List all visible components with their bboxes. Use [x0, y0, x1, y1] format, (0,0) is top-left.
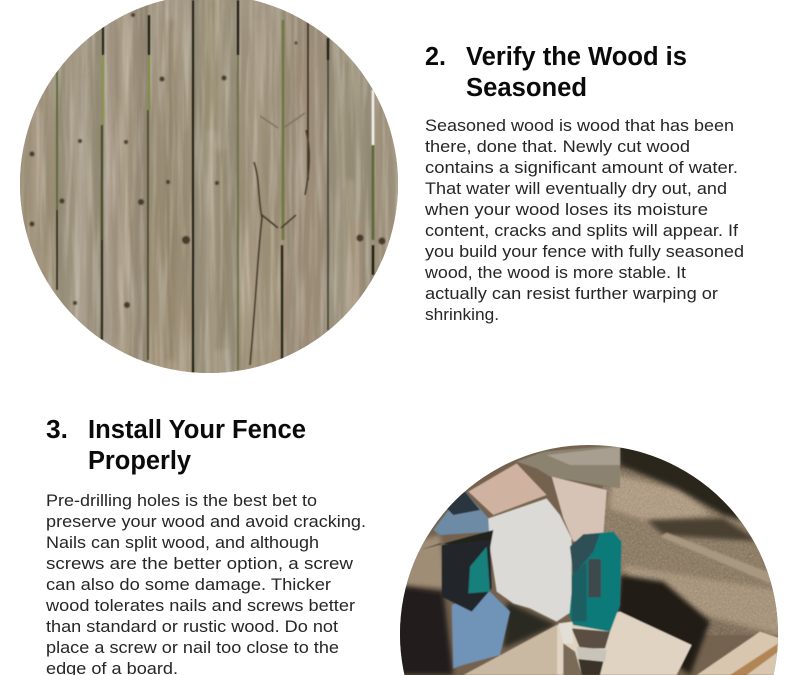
- photo: weathered wooden fence in a circle: [15, 0, 405, 380]
- heading: 3. Install Your Fence Properly: 3.: [46, 416, 68, 444]
- text block: install properly: place a screw or nail too close to the: [46, 639, 339, 657]
- heading: 2. Verify the Wood is Seasoned: [425, 43, 687, 102]
- text block: seasoned wood: content, cracks and splits will appear. If: [425, 222, 738, 240]
- heading: 2. Verify the Wood is Seasoned: Verify the Wood is: [466, 43, 687, 71]
- tree shadows on the ground: [400, 448, 754, 675]
- wood grain texture: [15, 0, 405, 380]
- text block: install properly: Nails can split wood, and although: [46, 534, 319, 552]
- plank on the ground: [660, 533, 772, 583]
- photo: gloved hand with a teal cordless drill in a circle: [393, 440, 790, 675]
- heading: 2. Verify the Wood is Seasoned: 2.: [425, 43, 446, 71]
- text block: seasoned wood: there, done that. Newly cut wood: [425, 138, 690, 156]
- text block: seasoned wood: you build your fence with fully seasoned: [425, 243, 744, 261]
- text block: seasoned wood: actually can resist further warping or: [425, 285, 719, 303]
- text block: seasoned wood: contains a significant amount of water.: [425, 159, 738, 177]
- battery pack: [420, 530, 493, 612]
- text block: seasoned wood: Seasoned wood is wood that has been: [425, 117, 734, 135]
- text block: seasoned wood: [424, 117, 744, 324]
- text block: install properly: than standard or rustic wood. Do not: [46, 618, 338, 636]
- fence planks: [15, 0, 402, 380]
- cracks and knots in the wood: [250, 113, 309, 365]
- text block: install properly: screws are the better option, a screw: [46, 555, 353, 573]
- text block: install properly: preserve your wood and avoid cracking.: [46, 513, 366, 531]
- text block: install properly: [45, 492, 366, 675]
- ground: [403, 468, 790, 642]
- board: [463, 612, 780, 675]
- text block: seasoned wood: That water will eventually dry out, and: [425, 180, 727, 198]
- text block: install properly: can also do some damage. Thicker: [46, 576, 332, 594]
- heading: 3. Install Your Fence Properly: Properly: [88, 447, 192, 475]
- jeans: [433, 492, 510, 668]
- heading: 3. Install Your Fence Properly: Install Your Fence: [88, 416, 306, 444]
- heading: 2. Verify the Wood is Seasoned: Seasoned: [466, 74, 587, 102]
- text block: install properly: Pre-drilling holes is the best bet to: [46, 492, 317, 510]
- gaps between planks: [57, 0, 373, 374]
- drill: [558, 532, 622, 675]
- glove: [488, 498, 572, 622]
- heading: 3. Install Your Fence Properly: [46, 416, 306, 475]
- text block: seasoned wood: wood, the wood is more stable. It: [424, 264, 686, 282]
- ground speckle: [603, 468, 778, 636]
- plank shading streaks: [30, 0, 364, 370]
- text block: seasoned wood: when your wood loses its moisture: [424, 201, 708, 219]
- text block: seasoned wood: shrinking.: [425, 306, 499, 324]
- text block: install properly: wood tolerates nails and screws better: [45, 597, 356, 615]
- sleeve: [468, 445, 620, 542]
